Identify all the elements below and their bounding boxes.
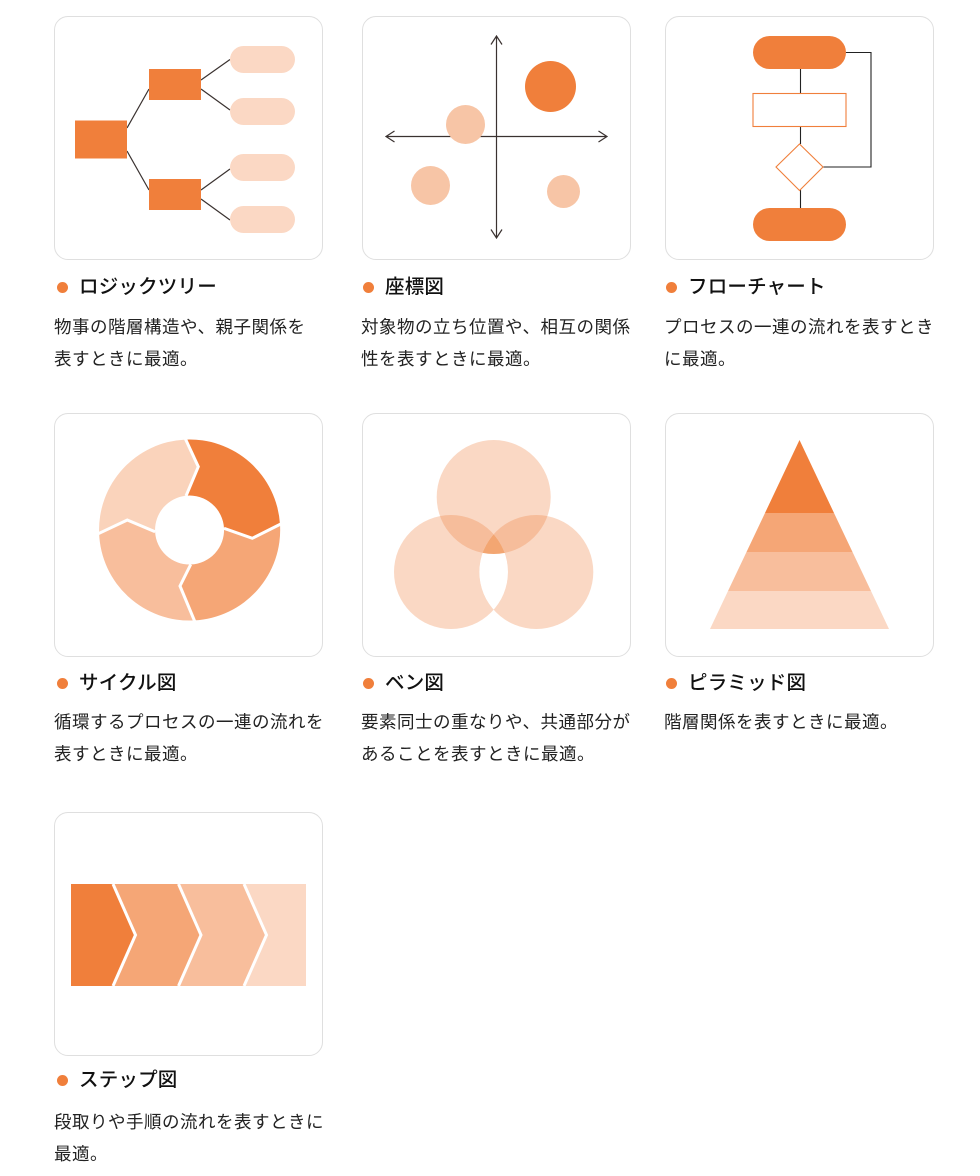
description: step diagram: 段取りや手順の流れを表すときに (54, 1112, 324, 1132)
heading: logic tree: ロジックツリー (79, 276, 217, 298)
description: step diagram (54, 1112, 324, 1164)
panel: logic tree diagram (54, 16, 323, 260)
description: venn diagram: あることを表すときに最適。 (361, 744, 595, 764)
description: coordinate diagram (361, 317, 630, 369)
description: venn diagram: 要素同士の重なりや、共通部分が (361, 712, 630, 732)
heading: coordinate diagram: 座標図 (385, 276, 444, 298)
panel: coordinate diagram (362, 16, 630, 260)
heading: step diagram: ステップ図 (79, 1069, 178, 1091)
description: logic tree (54, 317, 305, 369)
decision diamond (776, 144, 823, 190)
plotted circles (411, 61, 580, 208)
panel: cycle diagram (54, 413, 323, 657)
description: venn diagram (361, 712, 630, 764)
process box (753, 94, 846, 126)
start terminal (753, 36, 846, 69)
panel: venn diagram (362, 413, 630, 657)
description: flow chart: プロセスの一連の流れを表すとき (664, 317, 934, 337)
description: flow chart (664, 317, 934, 369)
heading: venn diagram: ベン図 (385, 672, 444, 694)
heading: pyramid diagram: ピラミッド図 (688, 672, 806, 694)
description: logic tree: 表すときに最適。 (54, 349, 198, 369)
white lens between lower circles (479, 534, 508, 610)
chevron separators (113, 884, 266, 986)
connector lines (127, 60, 230, 220)
description: cycle diagram: 循環するプロセスの一連の流れを (54, 712, 324, 732)
description: cycle diagram: 表すときに最適。 (54, 744, 198, 764)
description: coordinate diagram: 対象物の立ち位置や、相互の関係 (361, 317, 630, 337)
step chevrons (71, 884, 306, 986)
panel: step diagram (54, 812, 323, 1056)
orange boxes (75, 69, 201, 210)
panel: flow chart (665, 16, 934, 260)
description: coordinate diagram: 性を表すときに最適。 (361, 349, 541, 369)
heading: flow chart: フローチャート (688, 276, 826, 298)
description: flow chart: に最適。 (664, 349, 736, 369)
description: pyramid diagram: 階層関係を表すときに最適。 (664, 712, 898, 732)
end terminal (753, 208, 846, 241)
connector lines (800, 52, 871, 208)
central triple overlap (482, 534, 505, 554)
light pills (230, 46, 295, 233)
cycle segments (99, 439, 280, 621)
pyramid tiers (710, 440, 889, 629)
venn circles (394, 440, 593, 629)
description: logic tree: 物事の階層構造や、親子関係を (54, 317, 305, 337)
description: cycle diagram (54, 712, 324, 764)
heading: cycle diagram: サイクル図 (79, 672, 177, 694)
segment separators (97, 438, 282, 622)
panel: pyramid diagram (665, 413, 934, 657)
axes with arrows (386, 36, 607, 238)
description: step diagram: 最適。 (54, 1144, 108, 1164)
